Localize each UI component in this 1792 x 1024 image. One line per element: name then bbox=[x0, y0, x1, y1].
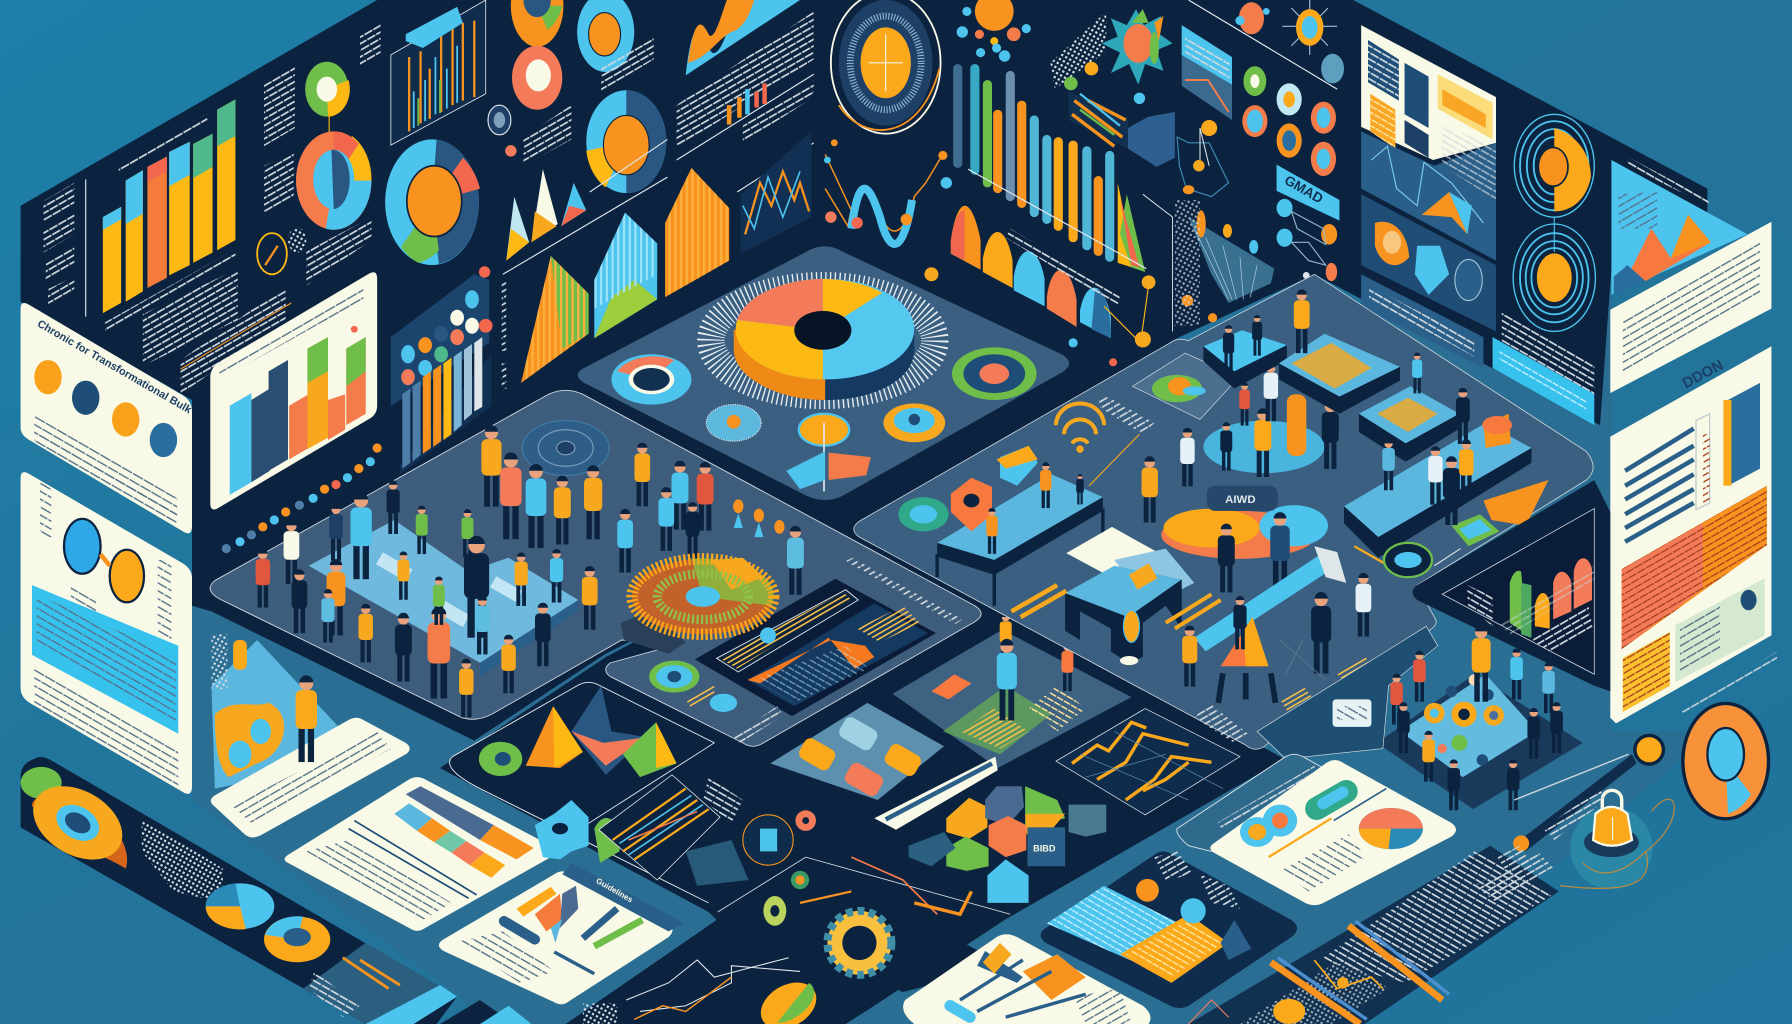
wave chart bbox=[677, 0, 800, 78]
peak charts bbox=[506, 169, 586, 261]
funnel bbox=[1175, 200, 1310, 326]
hex label: BIBD bbox=[1033, 843, 1056, 853]
team figures around table bbox=[256, 480, 598, 717]
chart caption bbox=[118, 114, 208, 174]
node cluster bbox=[1177, 120, 1229, 197]
panel: centre lower floor tiles bbox=[450, 613, 1240, 1024]
slate text tile bbox=[1361, 274, 1483, 368]
dotted text bbox=[142, 818, 223, 903]
wifi icon bbox=[1056, 404, 1139, 486]
triangle bars bbox=[968, 169, 1173, 331]
navy and yellow donut bbox=[586, 90, 666, 193]
bottom left dark strip bbox=[20, 757, 457, 1024]
panel: right wall grids bbox=[1361, 25, 1771, 723]
tag: AIWD bbox=[1207, 486, 1278, 511]
cream note bbox=[1610, 222, 1771, 393]
sky text banner bbox=[1493, 337, 1594, 425]
concentric icon bbox=[522, 421, 609, 475]
dark central floor bbox=[440, 526, 1285, 1024]
star burst bbox=[1102, 9, 1173, 85]
gauge dial bbox=[831, 0, 941, 134]
panel: peaks and area charts bbox=[222, 131, 811, 553]
orange area bbox=[665, 168, 729, 297]
hump connectors bbox=[925, 267, 1155, 366]
chart notes bbox=[143, 269, 286, 394]
green donut bbox=[305, 62, 350, 137]
segmented large donut bbox=[385, 139, 480, 265]
highlight block bbox=[1622, 486, 1767, 649]
work tables bbox=[1203, 330, 1549, 558]
radial dome chart bbox=[621, 558, 774, 654]
panel: top centre bars and humps bbox=[925, 0, 1344, 366]
slate shield tile bbox=[1361, 194, 1496, 331]
floor slab bbox=[210, 390, 981, 746]
colour dots bbox=[957, 0, 1031, 62]
report rows bbox=[1625, 429, 1694, 542]
strip tile bbox=[303, 943, 457, 1024]
cream grid bbox=[1361, 25, 1496, 160]
table tokens bbox=[1424, 674, 1504, 766]
cream report bbox=[1610, 346, 1771, 723]
text block bbox=[1502, 311, 1594, 402]
meeting table bbox=[309, 520, 578, 663]
sun spiral bottom bbox=[1513, 224, 1595, 331]
slate network tile bbox=[1361, 126, 1496, 261]
tile dots bbox=[222, 443, 382, 553]
orange and green area bbox=[521, 256, 589, 383]
stage circle bbox=[1180, 363, 1339, 486]
centre desk bbox=[1011, 527, 1194, 665]
pie icons bbox=[611, 347, 1037, 491]
pattern screen bbox=[696, 579, 935, 715]
node marker bbox=[488, 105, 517, 157]
small ring bbox=[257, 227, 306, 274]
line chart panel bbox=[566, 926, 846, 1024]
3D pie bbox=[734, 279, 914, 400]
card: glasses icon bbox=[40, 480, 171, 663]
table top bbox=[1400, 674, 1537, 777]
oval stage bbox=[1161, 505, 1328, 592]
panel: central pie deck bbox=[577, 246, 1070, 501]
card rings bbox=[1240, 776, 1362, 847]
stripe bars bbox=[874, 757, 998, 830]
dark text strip bbox=[1189, 846, 1559, 1024]
cone panel bbox=[450, 682, 714, 903]
pie charts bbox=[206, 883, 330, 962]
text stripes bbox=[846, 558, 962, 624]
table tops detail bbox=[376, 552, 522, 627]
side text blocks bbox=[264, 23, 381, 286]
lock rail bbox=[1474, 754, 1637, 903]
badge tile bbox=[770, 703, 944, 800]
sky screen bbox=[1182, 25, 1232, 120]
top ring donuts bbox=[511, 0, 634, 110]
gears panel bbox=[718, 857, 1010, 992]
person document bbox=[211, 634, 410, 837]
report sidebar bbox=[1696, 383, 1760, 510]
column chart bbox=[1510, 558, 1592, 638]
lock icon group bbox=[1560, 790, 1674, 889]
hump caption bbox=[1006, 229, 1120, 306]
cream document with chart bbox=[439, 863, 683, 1004]
panel: left wall bar chart bbox=[43, 99, 291, 394]
panel: left cream cards bbox=[21, 272, 377, 794]
tag: GMAD: GMAD bbox=[1282, 172, 1326, 206]
left wall text blocks bbox=[43, 183, 74, 304]
network line graph bbox=[825, 154, 943, 299]
coral and sky donut bbox=[296, 131, 371, 230]
standing analyst bbox=[787, 526, 804, 595]
diagonal text bbox=[523, 11, 814, 192]
person tile bbox=[893, 613, 1131, 768]
note card bbox=[1333, 699, 1371, 727]
base slab bbox=[1377, 674, 1583, 809]
card: bar chart bbox=[210, 272, 377, 510]
team figures back row bbox=[481, 425, 714, 573]
sky text block bbox=[32, 585, 178, 734]
vertical labels bbox=[502, 280, 506, 389]
cream bottom card bbox=[903, 934, 1150, 1024]
donut caption bbox=[1680, 651, 1777, 714]
screen graphic bbox=[1097, 353, 1239, 434]
dark data card bbox=[1041, 851, 1297, 1008]
floor slab bbox=[854, 274, 1593, 749]
slate tray bbox=[1177, 754, 1339, 851]
sun icon bbox=[1189, 0, 1344, 89]
bars bbox=[103, 99, 235, 313]
dotted block bbox=[1050, 11, 1106, 89]
long table bbox=[1166, 546, 1346, 651]
ribbon diagram bbox=[1064, 62, 1175, 167]
connector token bbox=[1633, 734, 1665, 766]
panel: gauge and network bbox=[824, 0, 952, 299]
ring tokens bbox=[1242, 66, 1336, 176]
card text bbox=[1280, 834, 1366, 891]
yellow and sage blocks bbox=[1623, 578, 1765, 712]
deck bbox=[577, 246, 1070, 501]
linked pills bbox=[1277, 199, 1337, 281]
floor plane bbox=[192, 263, 1714, 1024]
column strip bbox=[400, 337, 491, 474]
mini bar panel bbox=[391, 0, 486, 145]
card: glasses bbox=[21, 472, 192, 794]
lower left table bbox=[898, 446, 1103, 606]
sun spiral top bbox=[1514, 114, 1594, 274]
panel: left people floor bbox=[210, 390, 981, 746]
radial ticks bbox=[711, 286, 935, 395]
tag: AIWD: AIWD bbox=[1225, 494, 1256, 506]
tag: GMAD bbox=[1277, 165, 1339, 221]
lone figure bbox=[1142, 456, 1158, 523]
orange disc bbox=[20, 767, 135, 875]
cream card bbox=[1210, 760, 1456, 905]
report title: DDON bbox=[1680, 357, 1726, 392]
hanging markers bbox=[733, 499, 785, 537]
axis labels bbox=[105, 249, 235, 331]
side sky panel bbox=[1611, 157, 1747, 295]
panel: lower right cards bbox=[903, 651, 1777, 1024]
panel icons bbox=[649, 661, 783, 743]
presenter group bbox=[1182, 573, 1377, 743]
table teams bbox=[1223, 289, 1474, 525]
bottom corner card bbox=[440, 1000, 531, 1024]
sky area bbox=[594, 213, 657, 338]
card title: Chronic for Transformational Bulk bbox=[35, 318, 194, 417]
process tiles bbox=[599, 775, 816, 886]
trend lines screen bbox=[1056, 709, 1240, 815]
orange donut bbox=[1681, 702, 1770, 821]
dark wall backdrop bbox=[21, 0, 1707, 741]
panel: right people floor bbox=[854, 274, 1593, 749]
document header: Guidelines bbox=[594, 876, 635, 905]
cream document with legend bbox=[285, 777, 555, 931]
hex tiles bbox=[909, 786, 1106, 903]
network nodes bbox=[824, 139, 952, 281]
zigzag chart bbox=[741, 131, 811, 254]
panel: small column chart bbox=[1413, 480, 1610, 691]
panel: round table group bbox=[1257, 625, 1583, 810]
card: circles bbox=[21, 303, 194, 533]
legend tile panel bbox=[391, 266, 493, 406]
mini bars bbox=[727, 83, 767, 125]
card pie bbox=[1359, 808, 1423, 849]
magnifier bbox=[1354, 543, 1461, 577]
humps bbox=[951, 206, 1111, 338]
panel: wall donuts bbox=[257, 0, 814, 286]
table people bbox=[1390, 625, 1563, 810]
panel: lower left document group bbox=[20, 634, 683, 1024]
tall bars bbox=[958, 69, 1110, 257]
